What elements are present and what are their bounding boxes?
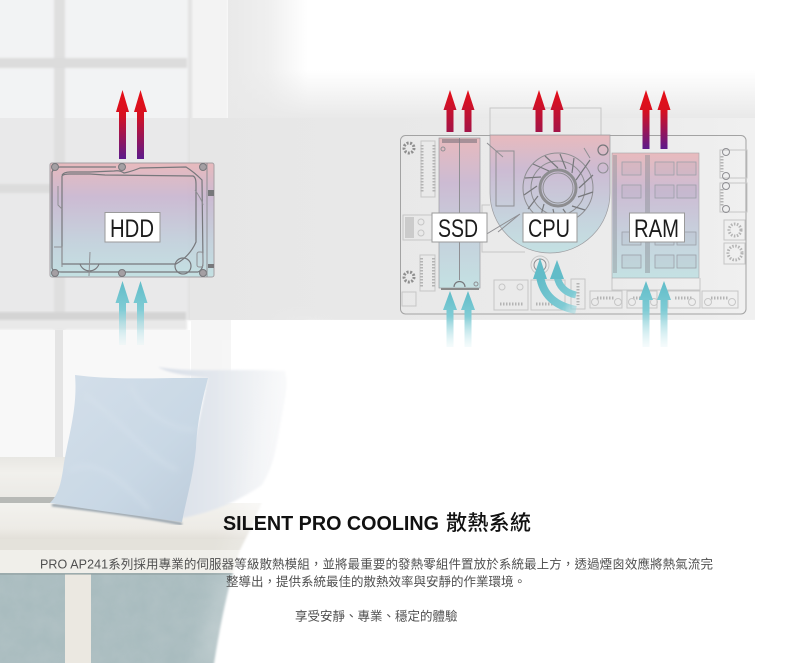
window upper panes [0,0,228,330]
arrows: cool air into HDD [116,281,148,345]
HDD unit [50,90,214,345]
back pillow [158,367,287,518]
label: RAM: RAM [634,215,679,243]
board connectors and mounting holes [402,108,747,310]
SSD module [439,138,480,290]
CPU heatsink and fan [480,135,610,253]
title: SILENT PRO COOLING [223,513,439,535]
motherboard diagram [400,90,747,347]
body text: 整導出，提供系統最佳的散熱效率與安靜的作業環境。 [226,574,526,589]
board outline [400,136,746,314]
front pillow [50,375,208,524]
RAM modules [612,153,699,278]
body text [40,556,713,624]
arrows: hot air out of HDD [116,90,147,159]
window sill [0,457,300,573]
body text: 享受安靜、專業、穩定的體驗 [295,608,458,624]
arrows: curved cool air into CPU [533,258,576,310]
grey band behind components [0,70,755,320]
arrows: cool air into RAM [639,281,671,347]
arrows: hot air out of SSD [444,90,474,132]
label: HDD: HDD [110,215,154,243]
window lower panes [0,320,231,457]
label: SSD: SSD [438,215,478,243]
arrows: hot air out of RAM [640,90,670,149]
upper wall fade [228,0,800,120]
window bottom rail [0,312,187,330]
icon: hard drive body [50,163,214,277]
white veil over right of photo [196,321,800,663]
arrows: cool air into SSD [443,291,475,347]
blue-grey base with white post [0,573,300,663]
label: CPU: CPU [528,215,570,243]
title: 散熱系統 [446,512,531,535]
body text: PRO AP241系列採用專業的伺服器等級散熱模組，並將最重要的發熱零組件置放於系統最上方，透過煙囪效應將熱氣流完 [40,556,713,572]
arrows: hot air out of CPU [532,90,564,132]
